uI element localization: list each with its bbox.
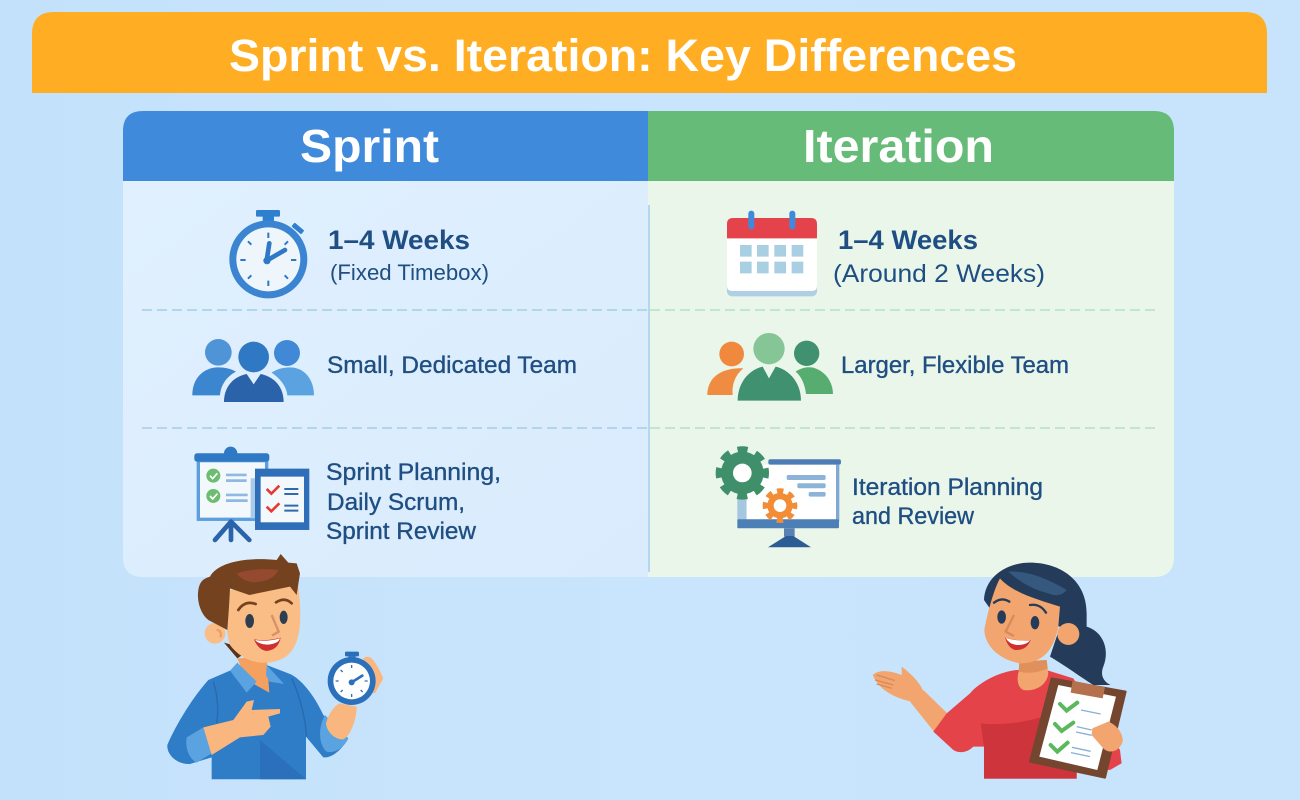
panel: sprint (123, 111, 648, 577)
face (1057, 623, 1079, 645)
text: sprint events: Daily Scrum, (327, 489, 465, 516)
icon: calendar (727, 211, 817, 296)
red shirt (933, 670, 1122, 779)
heading: sprint: Sprint (300, 120, 439, 172)
character: woman with clipboard (873, 563, 1126, 779)
heading: iteration (648, 111, 1174, 181)
icon: flexible team (707, 333, 833, 401)
text: sprint duration (328, 225, 489, 285)
shirt (167, 665, 348, 779)
heading: sprint (123, 111, 648, 181)
icon: gears and presentation screen (719, 450, 841, 547)
handheld stopwatch (345, 652, 359, 656)
hand on clipboard (1092, 722, 1123, 751)
text: sprint duration: (Fixed Timebox) (330, 260, 489, 285)
text: sprint duration: 1–4 Weeks (328, 225, 470, 255)
text: iteration events: and Review (852, 503, 975, 530)
title banner (32, 12, 1267, 93)
arm and open hand (910, 690, 947, 732)
icon: small team (192, 339, 314, 402)
text: sprint events (326, 459, 501, 545)
text: iteration duration: 1–4 Weeks (838, 225, 978, 255)
panel: iteration (648, 111, 1174, 577)
title banner: Sprint vs. Iteration: Key Differences (229, 30, 1017, 81)
heading: iteration: Iteration (803, 120, 994, 172)
text: iteration events: Iteration Planning (852, 474, 1043, 501)
text: sprint team: Small, Dedicated Team (327, 352, 577, 379)
character: man with stopwatch (167, 554, 383, 779)
neck (1018, 660, 1048, 690)
text: iteration duration (833, 225, 1045, 288)
right forearm (326, 703, 357, 739)
icon: stopwatch (229, 210, 307, 298)
text: iteration team: Larger, Flexible Team (841, 352, 1069, 379)
pointing hand (203, 700, 280, 755)
text: iteration events (852, 474, 1043, 530)
text: sprint events: Sprint Planning, (326, 459, 501, 486)
head (224, 643, 250, 658)
text: sprint events: Sprint Review (326, 518, 477, 545)
clipboard (1030, 678, 1126, 778)
icon: planning board and checklist (194, 447, 309, 540)
ponytail and hair back (984, 563, 1111, 685)
text: iteration duration: (Around 2 Weeks) (833, 260, 1045, 288)
